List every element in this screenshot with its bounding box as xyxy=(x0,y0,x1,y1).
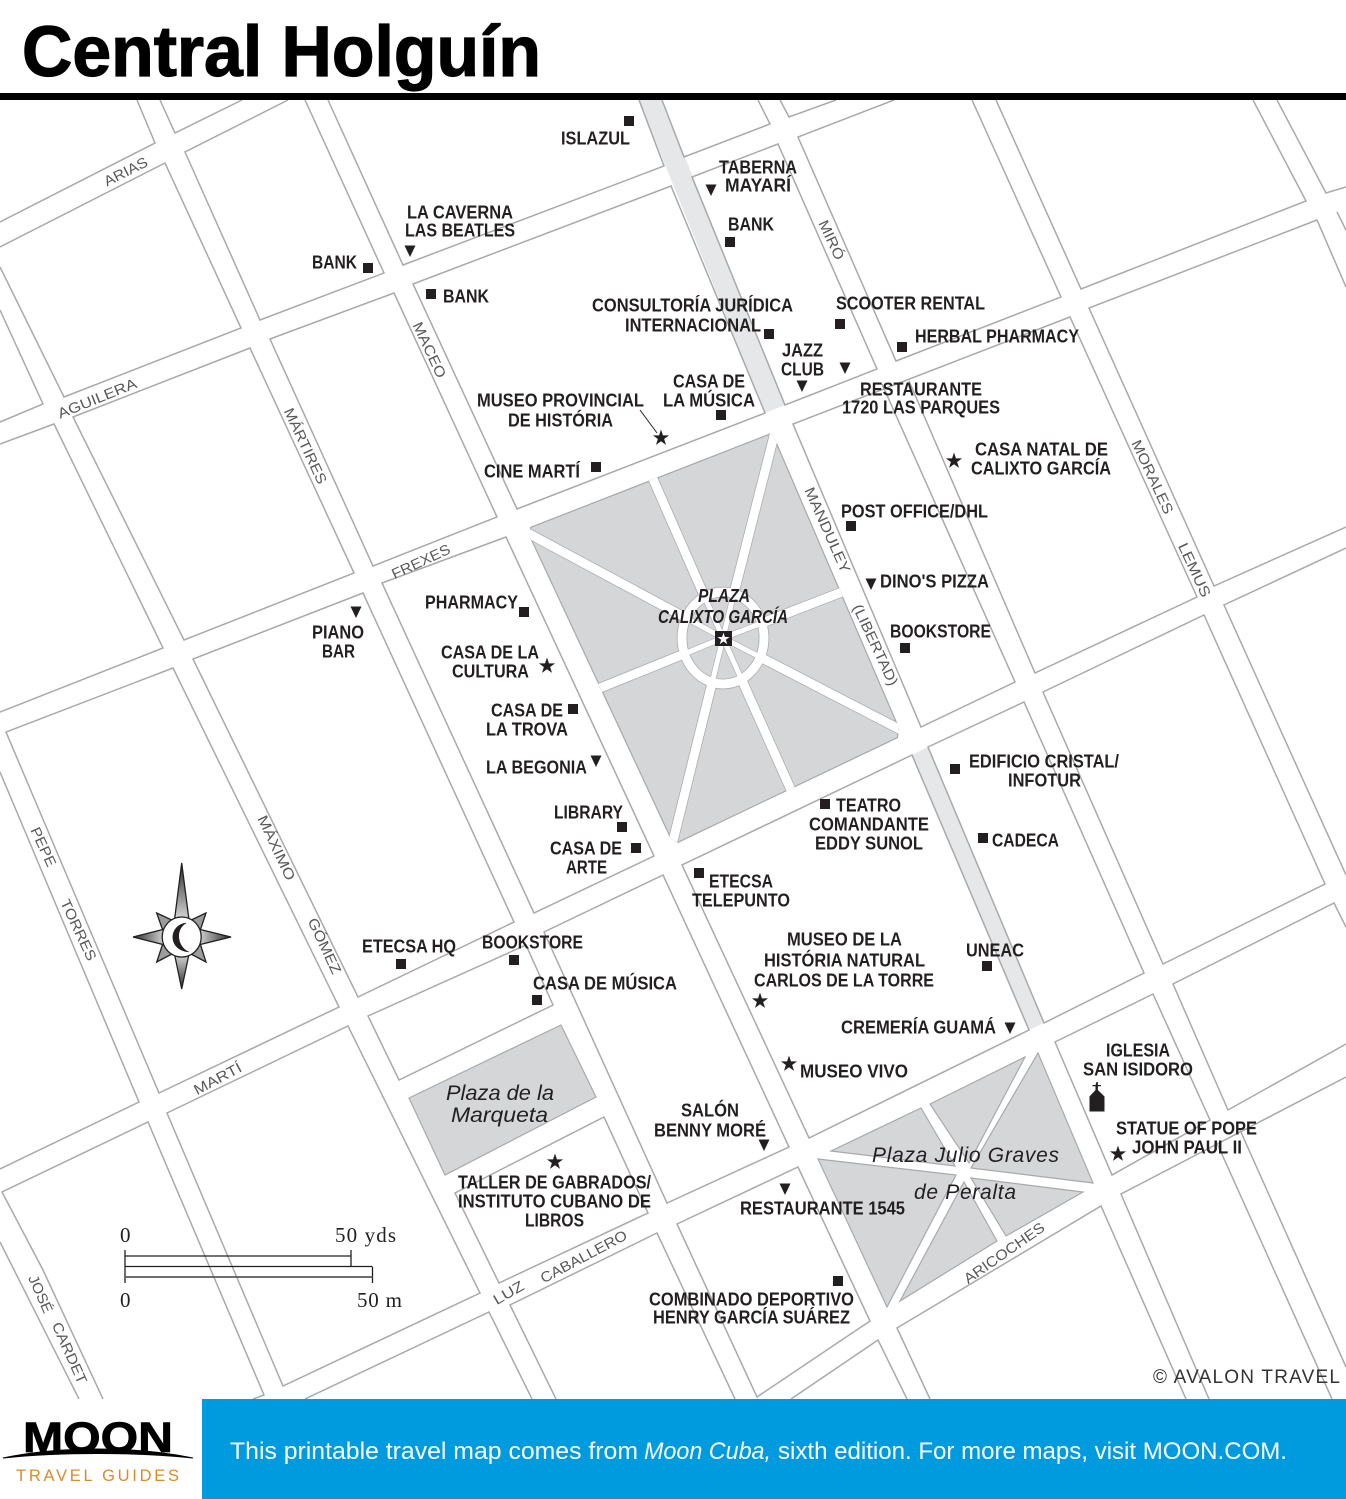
label: Casa de Arte: CASA DE xyxy=(550,838,622,858)
label: Islazul: ISLAZUL xyxy=(561,128,630,148)
label: Restaurante 1720 Las Parques: RESTAURANTE xyxy=(860,379,982,399)
label: Restaurante 1720 Las Parques xyxy=(840,362,1000,417)
label: Combinado Deportivo Henry García Suárez: HENRY GARCÍA SUÁREZ xyxy=(653,1306,850,1327)
label: Iglesia San Isidoro with church icon xyxy=(1083,1040,1193,1112)
scale bar: 50 m xyxy=(357,1288,402,1312)
label: Taberna Mayarí: MAYARÍ xyxy=(725,174,792,195)
title band xyxy=(0,0,1346,100)
label: Cremería Guamá: CREMERÍA GUAMÁ xyxy=(841,1016,996,1037)
label: Scooter Rental: SCOOTER RENTAL xyxy=(836,293,985,313)
label: Museo Provincial de História: DE HISTÓRIA xyxy=(508,409,613,430)
label: Consultoría Jurídica Internacional xyxy=(592,294,793,339)
street names: AGUILERA xyxy=(56,376,140,422)
label: Combinado Deportivo Henry García Suárez xyxy=(649,1276,854,1327)
title band: Central Holguín xyxy=(22,13,541,92)
street names: MORALES xyxy=(1127,438,1176,517)
label: Casa de la Trova xyxy=(486,700,578,739)
label: Casa de la Música xyxy=(663,371,755,420)
label: Salón Benny Moré: SALÓN xyxy=(681,1099,739,1120)
label: Cadeca: CADECA xyxy=(992,830,1059,850)
footer banner: sixth edition. For more maps, visit MOON.COM. xyxy=(778,1438,1287,1465)
label: La Begonia: LA BEGONIA xyxy=(486,757,587,777)
label: Post Office/DHL xyxy=(841,501,988,531)
street names: MÁRTIRES xyxy=(280,405,330,487)
label: UNEAC: UNEAC xyxy=(966,940,1024,960)
label: Scooter Rental xyxy=(835,293,985,329)
label: Teatro Comandante Eddy Sunol: EDDY SUNOL xyxy=(815,833,923,853)
label: Restaurante 1720 Las Parques: 1720 LAS PARQUES xyxy=(842,397,1000,417)
street names: PEPE xyxy=(26,825,59,870)
label: Iglesia San Isidoro with church icon: SAN ISIDORO xyxy=(1083,1059,1193,1079)
label: Museo de la História Natural Carlos de la Torre xyxy=(752,929,934,1008)
label: Restaurante 1545 xyxy=(740,1184,905,1218)
street names: ARICOCHES xyxy=(961,1220,1048,1288)
label: Dino's Pizza: DINO'S PIZZA xyxy=(880,571,989,591)
label: Taberna Mayarí xyxy=(706,157,797,196)
footer banner: Moon Cuba, xyxy=(644,1438,771,1465)
label: Herbal Pharmacy: HERBAL PHARMACY xyxy=(915,326,1079,346)
scale bar: 50 yds xyxy=(335,1223,396,1247)
label: Jazz Club: CLUB xyxy=(781,359,824,379)
label: Salón Benny Moré xyxy=(654,1099,770,1151)
label: Taller de Gabrados / Instituto Cubano de Libros: LIBROS xyxy=(525,1210,584,1230)
park: Plaza de la Marqueta xyxy=(409,1025,596,1175)
label: Iglesia San Isidoro with church icon: IGLESIA xyxy=(1106,1040,1170,1060)
footer banner: This printable travel map comes from xyxy=(230,1438,638,1465)
plaza name: Plaza de la Marqueta xyxy=(446,1082,554,1127)
label: Casa de Arte: ARTE xyxy=(566,857,607,877)
label: Herbal Pharmacy xyxy=(897,326,1079,352)
label: Casa de Arte xyxy=(550,838,641,877)
label: Casa de la Trova: LA TROVA xyxy=(486,719,568,739)
label: Taller de Gabrados / Instituto Cubano de Libros xyxy=(458,1154,651,1230)
logo: Moon Travel Guides: TRAVEL GUIDES xyxy=(16,1467,179,1485)
label: Casa de Música: CASA DE MÚSICA xyxy=(533,972,677,993)
label: Teatro Comandante Eddy Sunol: TEATRO xyxy=(836,795,901,815)
label: Plaza Calixto García with star marker xyxy=(658,586,788,646)
plaza name: Plaza Julio Graves de Peralta: Plaza Julio Graves xyxy=(872,1144,1060,1167)
label: Museo Vivo: MUSEO VIVO xyxy=(800,1061,908,1081)
label: Bookstore (Martí) xyxy=(482,932,583,965)
label: Statue of Pope John Paul II: JOHN PAUL II xyxy=(1132,1137,1242,1157)
label: Jazz Club: JAZZ xyxy=(782,340,823,360)
street names: MANDULEY xyxy=(801,485,853,576)
label: La Caverna Las Beatles: LA CAVERNA xyxy=(407,202,513,222)
label: Post Office/DHL: POST OFFICE/DHL xyxy=(841,501,988,521)
label: Consultoría Jurídica Internacional: INTERNACIONAL xyxy=(625,315,761,335)
park: Plaza Calixto García xyxy=(524,432,903,845)
street names: CARDET xyxy=(48,1320,89,1387)
label: Etecsa HQ xyxy=(362,936,456,969)
label: Statue of Pope John Paul II xyxy=(1110,1118,1257,1161)
label: Plaza Calixto García with star marker: PLAZA xyxy=(698,586,750,606)
label: Bank (north): BANK xyxy=(728,214,774,234)
label: Bookstore (east) xyxy=(890,621,991,653)
logo: Moon Travel Guides: MOON xyxy=(23,1414,173,1462)
label: Museo Provincial de História: MUSEO PROVINCIAL xyxy=(477,390,644,410)
plaza name: Plaza de la Marqueta: Marqueta xyxy=(451,1104,548,1127)
street names: GÓMEZ xyxy=(304,915,345,977)
street names: JOSÉ xyxy=(24,1272,56,1316)
label: Casa de la Música: CASA DE xyxy=(673,371,745,391)
label: Edificio Cristal/Infotur xyxy=(950,751,1119,790)
label: Museo Vivo xyxy=(781,1056,908,1081)
street names: (LIBERTAD) xyxy=(849,602,900,689)
label: Consultoría Jurídica Internacional: CONSULTORÍA JURÍDICA xyxy=(592,294,793,315)
label: Etecsa Telepunto: TELEPUNTO xyxy=(692,890,790,910)
street names: MÁXIMO xyxy=(254,813,299,883)
label: Etecsa Telepunto: ETECSA xyxy=(709,871,773,891)
copyright credit: © AVALON TRAVEL xyxy=(1153,1367,1340,1388)
label: Casa de Música xyxy=(532,972,677,1005)
scale bar: 0 xyxy=(120,1223,130,1247)
street names: CABALLERO xyxy=(538,1228,630,1287)
label: Taller de Gabrados / Instituto Cubano de Libros: TALLER DE GABRADOS/ xyxy=(458,1172,651,1192)
plaza name: Plaza Julio Graves de Peralta: de Peralta xyxy=(914,1181,1016,1204)
street names: LUZ xyxy=(491,1278,527,1309)
plaza name: Plaza Julio Graves de Peralta xyxy=(872,1144,1060,1204)
label: Plaza Calixto García with star marker: CALIXTO GARCÍA xyxy=(658,606,788,627)
label: Piano Bar: BAR xyxy=(322,641,355,661)
label: Casa de la Cultura: CULTURA xyxy=(452,661,529,681)
label: Bank (Maceo) xyxy=(426,286,489,306)
label: Library: LIBRARY xyxy=(554,802,623,822)
label: Edificio Cristal/Infotur: EDIFICIO CRISTAL/ xyxy=(969,751,1119,771)
label: Museo Provincial de História xyxy=(477,390,669,445)
label: Cine Martí: CINE MARTÍ xyxy=(484,460,581,481)
park: Plaza Julio Graves de Peralta xyxy=(818,1053,1093,1307)
icon: compass rose xyxy=(133,863,231,989)
label: Teatro Comandante Eddy Sunol: COMANDANTE xyxy=(809,814,929,834)
label: Bookstore (Martí): BOOKSTORE xyxy=(482,932,583,952)
label: Bank (west): BANK xyxy=(312,252,357,272)
street names: FREXES xyxy=(389,542,453,583)
street names: ARIAS xyxy=(102,155,151,190)
label: Casa Natal de Calixto García xyxy=(946,439,1111,478)
label: Casa de la Trova: CASA DE xyxy=(491,700,563,720)
label: Casa de la Música: LA MÚSICA xyxy=(663,389,755,410)
label: Bank (north) xyxy=(725,214,774,247)
label: Museo de la História Natural Carlos de la Torre: HISTÓRIA NATURAL xyxy=(764,949,925,970)
label: Combinado Deportivo Henry García Suárez: COMBINADO DEPORTIVO xyxy=(649,1289,854,1309)
label: Casa de la Cultura xyxy=(441,642,555,681)
label: Bank (Maceo): BANK xyxy=(443,286,489,306)
label: Piano Bar: PIANO xyxy=(312,622,364,642)
label: La Caverna Las Beatles xyxy=(404,202,515,257)
street names: LEMUS xyxy=(1174,541,1213,600)
scale bar: 0 xyxy=(120,1288,130,1312)
street names: MIRÓ xyxy=(814,217,848,263)
label: Jazz Club xyxy=(781,340,824,392)
label: Casa Natal de Calixto García: CASA NATAL DE xyxy=(975,439,1108,459)
label: Museo de la História Natural Carlos de la Torre: CARLOS DE LA TORRE xyxy=(754,970,934,990)
label: Taller de Gabrados / Instituto Cubano de Libros: INSTITUTO CUBANO DE xyxy=(458,1191,651,1211)
logo: Moon Travel Guides xyxy=(0,1399,202,1499)
footer banner xyxy=(202,1399,1346,1499)
street names: MACEO xyxy=(409,320,449,381)
label: Statue of Pope John Paul II: STATUE OF POPE xyxy=(1116,1118,1257,1138)
label: Etecsa HQ: ETECSA HQ xyxy=(362,936,456,956)
label: Library xyxy=(554,802,627,832)
label: UNEAC xyxy=(966,940,1024,971)
scale bar xyxy=(120,1223,402,1312)
label: Islazul xyxy=(561,116,634,148)
label: Restaurante 1545: RESTAURANTE 1545 xyxy=(740,1198,905,1218)
label: Salón Benny Moré: BENNY MORÉ xyxy=(654,1119,766,1140)
street names xyxy=(24,155,1213,1387)
street names: MARTÍ xyxy=(191,1059,245,1099)
label: Pharmacy: PHARMACY xyxy=(425,592,518,612)
label: Taberna Mayarí: TABERNA xyxy=(719,157,797,177)
label: Museo de la História Natural Carlos de la Torre: MUSEO DE LA xyxy=(787,929,902,949)
label: Piano Bar xyxy=(312,606,364,661)
label: Edificio Cristal/Infotur: INFOTUR xyxy=(1008,770,1081,790)
label: Etecsa Telepunto xyxy=(692,868,790,910)
street names: TORRES xyxy=(56,897,99,964)
label: Teatro Comandante Eddy Sunol xyxy=(809,795,929,853)
label: La Caverna Las Beatles: LAS BEATLES xyxy=(405,220,515,240)
label: Casa de la Cultura: CASA DE LA xyxy=(441,642,539,662)
label: Bookstore (east): BOOKSTORE xyxy=(890,621,991,641)
label: Casa Natal de Calixto García: CALIXTO GARCÍA xyxy=(971,457,1111,478)
plaza name: Plaza de la Marqueta: Plaza de la xyxy=(446,1082,554,1105)
